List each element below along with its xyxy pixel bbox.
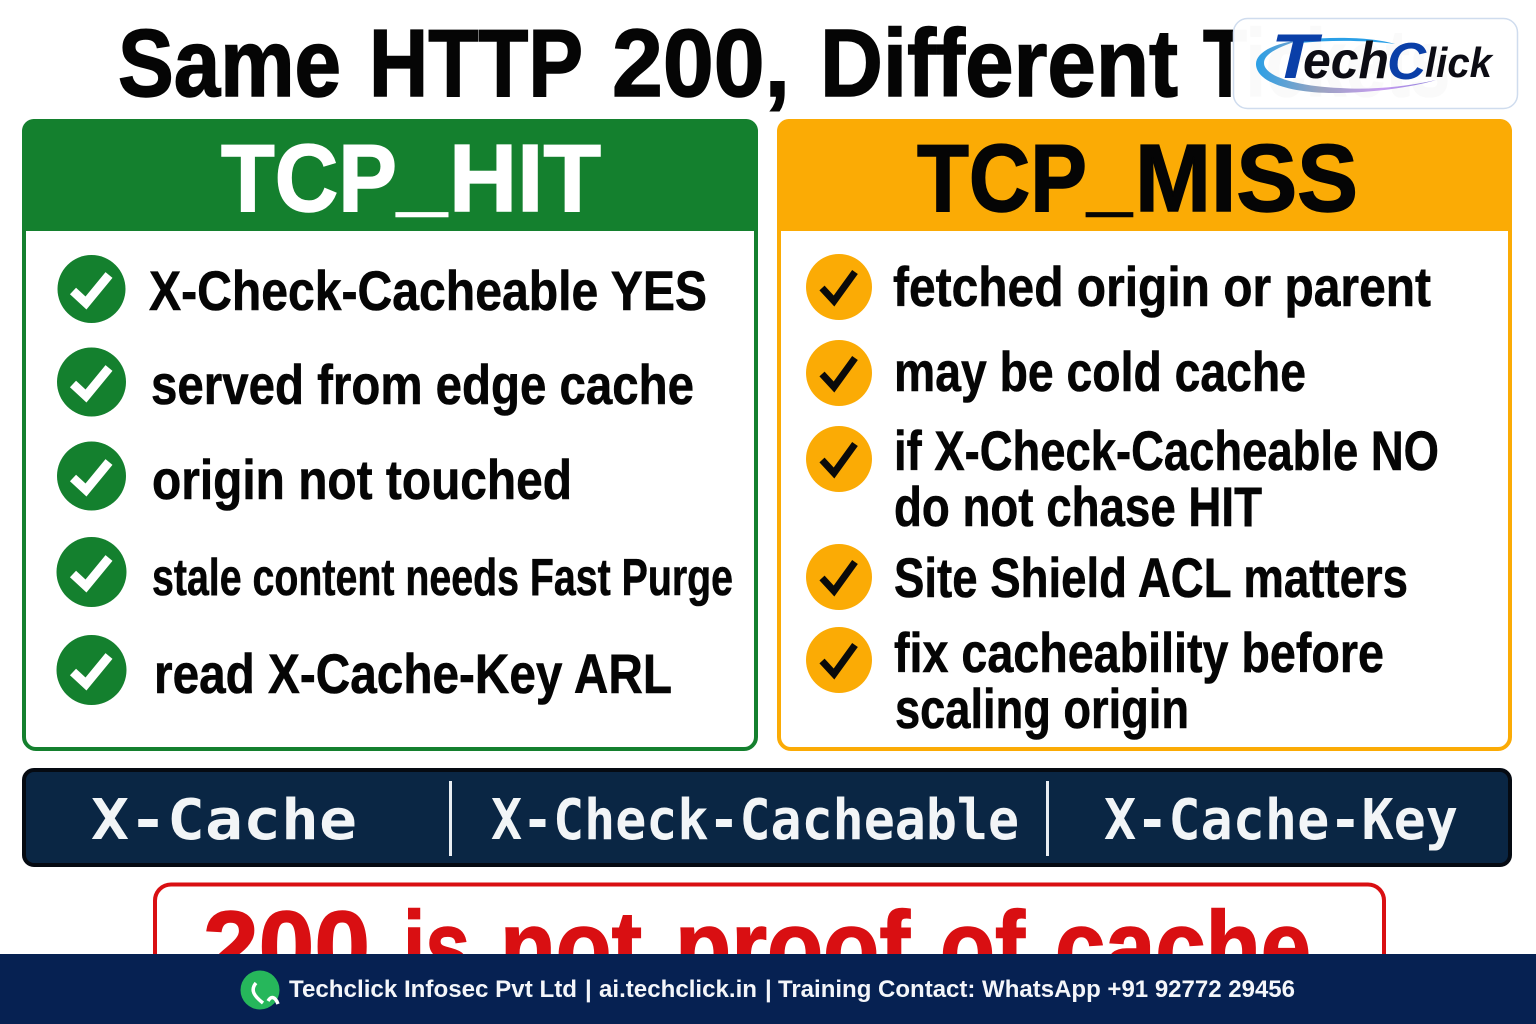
item: origin not touched: origin not touched: [152, 448, 572, 511]
item: stale content needs Fast Purge: stale content needs Fast Purge: [152, 549, 733, 607]
item: Site Shield ACL matters: [806, 544, 1408, 610]
item: fix cacheability before scaling origin: fix cacheability before: [894, 621, 1384, 684]
footer bar: [0, 954, 1536, 1024]
panel: TCP_HIT: [22, 119, 758, 749]
logo: TechClick: [1234, 18, 1518, 108]
footer text: Training Contact: WhatsApp +91 92772 29456: [778, 976, 1295, 1003]
footer text: Techclick Infosec Pvt Ltd: [289, 976, 577, 1003]
header: TCP_HIT: TCP: [221, 125, 397, 232]
item: may be cold cache: [806, 340, 1306, 406]
title: Different: [820, 10, 1178, 117]
logo: TechClick: C: [1387, 33, 1427, 91]
logo: TechClick: T: [1271, 22, 1322, 92]
header strip: [24, 770, 1510, 865]
item: may be cold cache: may be cold cache: [894, 340, 1306, 403]
item: served from edge cache: served from edge cache: [151, 353, 694, 416]
footer text: ai.techclick.in: [599, 976, 757, 1003]
header: TCP_MISS: MISS: [1135, 125, 1358, 232]
panel: TCP_MISS: [777, 119, 1512, 749]
footer text: [289, 976, 1295, 1003]
label: X-Check-Cacheable: X-Check-Cacheable: [491, 788, 1019, 853]
logo: TechClick: ech: [1303, 32, 1389, 90]
item: if X-Check-Cacheable NO do not chase HIT: do not chase HIT: [894, 475, 1262, 538]
label: X-Cache: X-Cache: [91, 788, 357, 853]
header: TCP_HIT: [22, 119, 758, 232]
title: [118, 10, 1450, 117]
title: 200,: [612, 10, 790, 117]
item: fix cacheability before scaling origin: scaling origin: [895, 677, 1189, 740]
item: origin not touched: [57, 442, 572, 511]
title: Tickets: [1203, 10, 1450, 117]
callout: 200 is not proof of cache: cache: [1055, 891, 1311, 1003]
item: stale content needs Fast Purge: [56, 537, 733, 607]
item: fetched origin or parent: fetched origin or parent: [893, 255, 1431, 318]
callout: 200 is not proof of cache: [155, 884, 1384, 1004]
header: TCP_MISS: _: [1086, 119, 1133, 226]
header: TCP_HIT: HIT: [449, 125, 601, 232]
icon: WhatsApp: [240, 970, 280, 1010]
footer text: |: [585, 976, 592, 1003]
footer text: |: [765, 976, 772, 1003]
item: served from edge cache: [57, 348, 694, 416]
item: if X-Check-Cacheable NO do not chase HIT: [806, 419, 1439, 538]
label: X-Cache-Key: X-Cache-Key: [1104, 788, 1458, 853]
header: TCP_HIT: _: [396, 119, 449, 226]
title: Same: [118, 10, 341, 117]
title: HTTP: [369, 10, 583, 117]
item: X-Check-Cacheable YES: X-Check-Cacheable YES: [149, 259, 707, 322]
callout: 200 is not proof of cache: proof: [675, 891, 911, 1003]
logo: TechClick: lick: [1425, 39, 1495, 86]
header: TCP_MISS: TCP: [917, 125, 1087, 232]
callout: 200 is not proof of cache: is: [403, 891, 470, 1003]
callout: 200 is not proof of cache: of: [940, 891, 1026, 1003]
header: TCP_MISS: [777, 119, 1512, 232]
item: fix cacheability before scaling origin: [806, 621, 1384, 740]
item: read X-Cache-Key ARL: [56, 635, 672, 705]
item: read X-Cache-Key ARL: read X-Cache-Key ARL: [154, 642, 672, 705]
callout: 200 is not proof of cache: 200: [203, 891, 370, 1003]
callout: 200 is not proof of cache: not: [500, 891, 642, 1003]
item: Site Shield ACL matters: Site Shield ACL matters: [894, 546, 1408, 609]
